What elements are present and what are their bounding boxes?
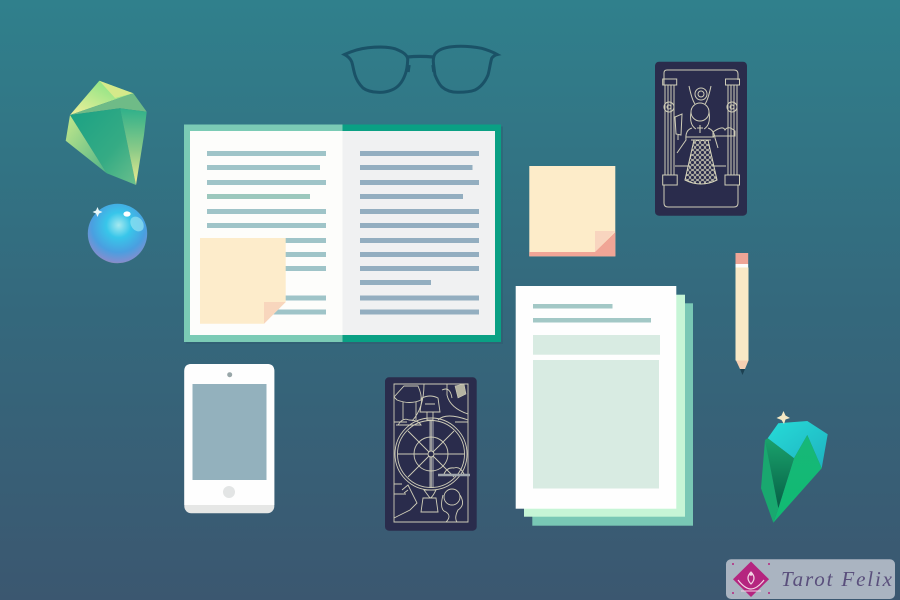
icon: ball sparkle bbox=[92, 207, 102, 217]
front sheet bbox=[516, 286, 676, 509]
icon: green crystal bbox=[66, 81, 147, 185]
sticky note on book bbox=[200, 238, 286, 324]
icon: pencil bbox=[736, 253, 748, 375]
tarot card: wheel of fortune bbox=[385, 377, 477, 531]
text lines: left page bbox=[207, 151, 326, 314]
sticky note bbox=[529, 166, 615, 256]
icon: emerald sparkle bbox=[776, 411, 790, 424]
icon: tablet device bbox=[184, 364, 274, 513]
icon: crystal ball bbox=[88, 204, 147, 263]
logo badge bbox=[726, 559, 895, 599]
icon: glasses bbox=[344, 46, 497, 92]
icon: emerald crystal bbox=[761, 411, 828, 523]
tarot card: high priestess bbox=[655, 62, 747, 216]
panel: stacked papers bbox=[516, 286, 693, 526]
back sheet bbox=[532, 303, 693, 526]
text lines: right page bbox=[360, 151, 479, 314]
logo wordmark: Tarot Felix bbox=[781, 567, 893, 591]
panel: open book bbox=[184, 124, 503, 344]
logo mark bbox=[732, 562, 770, 597]
middle sheet bbox=[524, 295, 685, 517]
